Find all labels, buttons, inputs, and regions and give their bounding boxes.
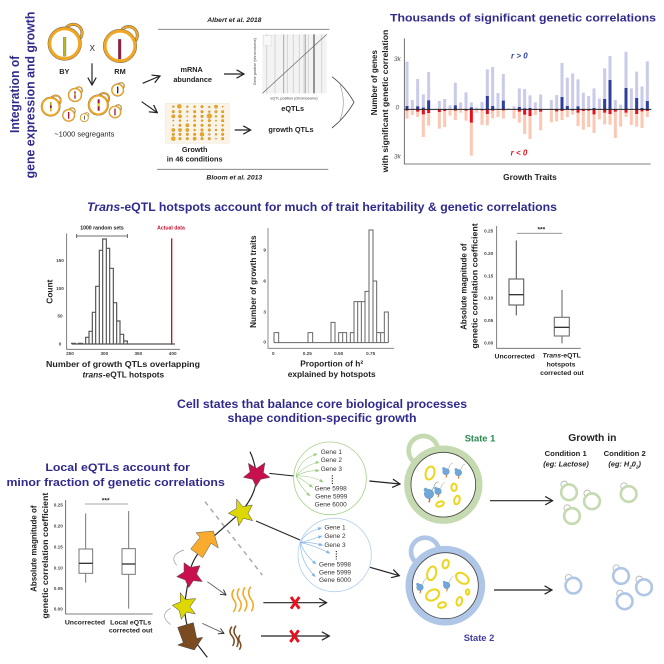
arrow: arrow to brown mRNA xyxy=(202,623,224,633)
tick labels: 3 xyxy=(263,309,266,314)
source: Bloom et al: Bloom et al. 2013 xyxy=(206,174,262,181)
heading: integration xyxy=(8,12,37,178)
axes xyxy=(67,233,180,349)
icon: blue daughter cells xyxy=(565,565,652,609)
tick labels: 0.25 xyxy=(54,503,63,508)
label: growth in 46 conditions xyxy=(167,145,223,163)
cell: state 1 xyxy=(408,436,479,520)
arrow: green set to state 1 xyxy=(369,481,400,484)
icon: brown mRNA xyxy=(230,626,241,650)
panel: genetic correlation bar chart xyxy=(370,13,656,182)
connector: crimson star to gene set xyxy=(269,473,294,476)
icon: RM parent yeast: RM xyxy=(114,67,126,76)
label: mRNA abundance: mRNA xyxy=(180,65,204,74)
panel: integration of gene expression and growth xyxy=(8,12,354,181)
icon: yellow star lower xyxy=(172,593,196,619)
label: condition 1: Condition 1 xyxy=(545,449,587,458)
section heading: cell states: shape condition-specific growth xyxy=(228,411,416,425)
label: mRNA abundance: abundance xyxy=(173,75,212,84)
tick labels: 0.00 xyxy=(54,607,63,612)
x axis label: Growth Traits xyxy=(503,172,557,182)
arrow: blocked brown xyxy=(261,630,329,642)
bars: light negative xyxy=(407,109,647,156)
y label xyxy=(459,223,480,349)
label: condition 2 xyxy=(604,449,646,469)
label: mRNA abundance xyxy=(173,65,212,84)
icon: green daughter cells xyxy=(561,481,637,524)
y axis label xyxy=(370,30,390,173)
tick labels xyxy=(56,258,177,356)
x labels: hotspots xyxy=(547,361,576,368)
heading: growth in: Growth in xyxy=(568,433,616,444)
y label: genetic correlation coefficient xyxy=(471,223,480,349)
chart axes xyxy=(404,38,651,164)
gene set: green circle xyxy=(294,442,366,515)
y label: Absolute magnitude of xyxy=(459,243,468,330)
x label: Proportion of h² xyxy=(300,358,363,368)
tick labels: 0.25 xyxy=(484,229,494,234)
tick labels: 0.50 xyxy=(334,351,344,356)
bracket: random sets: 1000 random sets xyxy=(80,226,124,232)
y label: Number of growth traits xyxy=(249,235,258,328)
heading: integration: gene expression and growth xyxy=(23,12,37,178)
tick labels: 0.10 xyxy=(54,565,63,570)
histogram bars xyxy=(274,230,388,343)
heading: local eQTLs: minor fraction of genetic correlations xyxy=(6,477,225,489)
y label xyxy=(30,492,50,619)
gene set: blue circle: Gene 5999 xyxy=(319,569,351,576)
arrow: growth to QTLs xyxy=(235,128,251,132)
icon: brown arrow xyxy=(178,623,203,650)
x labels: corrected out xyxy=(540,370,585,377)
icon: BY parent yeast: BY xyxy=(59,67,70,76)
arrow: blue set to state 2 xyxy=(370,567,399,576)
chart: eQTL map xyxy=(253,34,327,101)
label: growth QTLs: growth QTLs xyxy=(268,125,314,134)
cross symbol: X xyxy=(90,44,96,53)
arrow: cross to segregants xyxy=(90,63,94,85)
label: condition 2: (eg: H xyxy=(608,460,629,469)
axes xyxy=(268,228,394,348)
connector: yellow star to gene set xyxy=(256,521,300,540)
label: actual data: Actual data xyxy=(157,226,185,232)
label: segregants: ~1000 segregants xyxy=(54,130,115,139)
arrow: state 1 to growth xyxy=(490,499,553,502)
gene set: blue circle: Gene 2 xyxy=(324,533,346,540)
axes xyxy=(497,226,581,348)
gene set: green circle: Gene 5999 xyxy=(315,493,348,500)
significance bracket xyxy=(85,498,128,505)
box: local eQTLs corrected xyxy=(122,511,135,609)
panel: local eQTLs xyxy=(6,452,329,657)
gene set: green circle: Gene 2 xyxy=(321,457,342,464)
significance bracket: *** xyxy=(102,498,110,505)
x label xyxy=(46,359,200,380)
y label: genetic correlation coefficient xyxy=(41,492,50,619)
panel: trans-eQTL boxplot xyxy=(459,223,585,377)
heading: local eQTLs xyxy=(6,462,225,489)
bracket: random sets xyxy=(77,226,127,238)
tick labels: 0.05 xyxy=(54,586,63,591)
arrow: mRNA to eQTLs xyxy=(224,72,244,76)
tick labels: 150 xyxy=(56,258,64,263)
y axis label: with significant genetic correlation xyxy=(381,30,390,173)
arrow: state 2 to growth xyxy=(494,588,552,592)
tick labels: 0.20 xyxy=(484,251,494,256)
y label: Absolute magnitude of xyxy=(30,505,39,592)
axis tick labels xyxy=(394,56,402,161)
icon: segregant yeasts xyxy=(42,83,124,122)
gene set: blue circle: Gene 3 xyxy=(324,542,346,549)
x label: trans-eQTL hotspots xyxy=(82,370,165,380)
x labels: Trans-eQTL xyxy=(543,353,581,360)
label: r positive: r > 0 xyxy=(511,52,528,61)
significance bracket: *** xyxy=(537,226,546,233)
bars: light positive xyxy=(407,52,647,109)
x labels: Local eQTLs xyxy=(110,619,151,626)
box: uncorrected xyxy=(79,513,93,583)
arrow: to mRNA xyxy=(143,76,160,83)
marker: actual data line xyxy=(170,238,174,345)
tick labels: 0 xyxy=(272,351,275,356)
arrow: blocked orange xyxy=(263,597,327,609)
x labels xyxy=(65,619,153,635)
gene set: blue circle: Gene 1 xyxy=(324,525,346,532)
icon: RM parent yeast xyxy=(105,27,137,76)
tick labels: 0.75 xyxy=(366,351,376,356)
tick labels: 0 xyxy=(59,341,62,346)
gene set: blue circle: Gene 5998 xyxy=(319,561,351,568)
tick labels: 300 xyxy=(100,351,109,356)
chart: growth plate xyxy=(165,103,229,143)
icon: crimson star upper xyxy=(243,463,270,487)
label: eQTLs: eQTLs xyxy=(281,104,304,113)
panel: proportion of h2 histogram xyxy=(268,228,394,348)
gene set: green circle: Gene 6000 xyxy=(315,501,347,508)
chart: eQTL map: Gene position (chromosome) xyxy=(253,38,257,85)
icon: converging chevron xyxy=(332,77,354,128)
gene set: green circle: Gene 1 xyxy=(321,449,342,456)
x label: Number of growth QTLs overlapping xyxy=(46,359,200,369)
pathway backbone xyxy=(184,452,257,657)
icon: orange arrow xyxy=(191,531,218,558)
tick labels: 50 xyxy=(57,314,63,319)
label: condition 2: 2 xyxy=(635,464,639,469)
label: condition 2: 2 xyxy=(628,464,632,469)
label: state 1: State 1 xyxy=(465,434,495,444)
panel: gene networks xyxy=(294,442,400,592)
histogram bars xyxy=(72,239,175,344)
gene set: blue circle xyxy=(298,518,371,592)
gene set: green circle: Gene 3 xyxy=(321,466,342,473)
tick labels xyxy=(54,503,63,612)
x labels: corrected out xyxy=(109,628,153,635)
x label xyxy=(288,358,376,379)
bars: significant positive xyxy=(407,80,647,109)
heading: thousands of correlations: Thousands of significant genetic correlations xyxy=(390,13,656,25)
tick labels: 400 xyxy=(169,351,177,356)
label: state 2: State 2 xyxy=(464,633,494,643)
chart: eQTL map: eQTL position (chromosome) xyxy=(270,97,318,101)
label: condition 2: 0 xyxy=(632,460,636,469)
axis tick labels: 0 xyxy=(395,104,399,111)
label: r negative: r < 0 xyxy=(511,149,528,158)
tick labels: 0.15 xyxy=(484,274,494,279)
section heading: cell states xyxy=(177,397,467,425)
panel: cell states and growth xyxy=(408,433,652,643)
grey feedback arrows xyxy=(164,550,184,625)
label: condition 2: Condition 2 xyxy=(604,449,646,458)
y label: count: Count xyxy=(45,279,55,304)
tick labels: 6 xyxy=(263,278,266,283)
tick labels: 250 xyxy=(66,351,74,356)
axis tick labels: 3k xyxy=(394,56,402,63)
heading: integration: Integration of xyxy=(8,55,22,133)
source: Albert et al: Albert et al. 2018 xyxy=(206,17,262,24)
arrow: star to orange mRNA xyxy=(207,582,226,595)
tick labels xyxy=(484,229,494,345)
label: growth in 46 conditions: in 46 conditions xyxy=(167,154,223,163)
label: growth in 46 conditions: Growth xyxy=(182,145,208,154)
tick labels: 0.25 xyxy=(303,351,312,356)
tick labels xyxy=(263,247,376,356)
axis tick labels: 3k xyxy=(394,154,402,161)
x label: explained by hotspots xyxy=(288,369,376,379)
label: condition 1 xyxy=(543,449,589,468)
icon: BY parent yeast xyxy=(50,24,82,76)
icon: crimson star lower xyxy=(177,563,202,588)
tick labels: 9 xyxy=(263,247,266,252)
tick labels: 0.15 xyxy=(54,545,63,550)
box: corrected xyxy=(554,290,569,343)
box: uncorrected xyxy=(509,240,524,315)
section heading: trans-eQTL hotspots: Trans-eQTL hotspots account for much of trait heritability & genetic correlations xyxy=(87,200,557,214)
tick labels: 0 xyxy=(263,339,266,344)
dashed separator xyxy=(205,502,262,575)
tick labels: 0.05 xyxy=(484,318,494,323)
gene set: blue circle: Gene 6000 xyxy=(319,577,351,584)
arrow: to growth xyxy=(142,102,157,113)
tick labels: 0.00 xyxy=(484,340,494,345)
tick labels: 100 xyxy=(56,286,64,291)
gene set: green circle: Gene 5998 xyxy=(315,485,347,492)
cell: state 2 xyxy=(409,538,482,622)
x labels: Uncorrected xyxy=(495,354,535,361)
axes xyxy=(66,500,153,614)
x labels xyxy=(495,353,585,377)
x labels: Uncorrected xyxy=(65,619,105,626)
heading: local eQTLs: Local eQTLs account for xyxy=(45,462,191,474)
label: condition 1: (eg: Lactose) xyxy=(543,459,589,468)
hotspot histogram labels xyxy=(249,235,376,379)
y axis label: Number of genes xyxy=(370,49,379,115)
significance bracket xyxy=(517,226,562,233)
icon: yellow star upper xyxy=(228,499,253,526)
section heading: cell states: Cell states that balance core biological processes xyxy=(177,397,467,411)
tick labels: 0.10 xyxy=(484,296,494,301)
icon: orange mRNA xyxy=(232,587,253,612)
bars: significant negative xyxy=(407,109,647,123)
label: condition 2: ) xyxy=(637,460,641,469)
tick labels: 0.20 xyxy=(54,524,63,529)
tick labels: 350 xyxy=(134,351,143,356)
panel: growth QTL histogram xyxy=(45,226,200,380)
